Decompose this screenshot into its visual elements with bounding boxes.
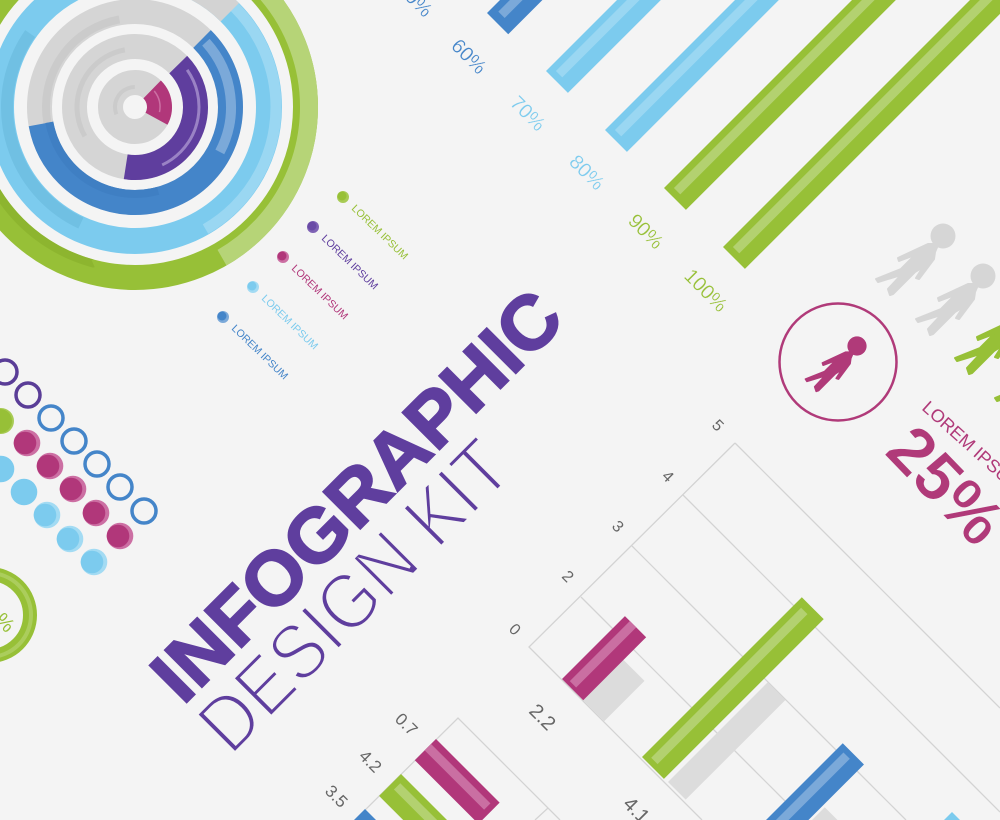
green dot: [0, 408, 14, 434]
axis label: 90%: 90%: [623, 210, 667, 254]
bar chart: lower: [321, 709, 560, 820]
icon: green person: [955, 302, 1000, 374]
legend: [217, 191, 410, 382]
bar: gray: [668, 682, 785, 800]
axis labels: 3: [608, 518, 627, 536]
icon: gray person: [876, 224, 956, 295]
icon: gray person: [916, 264, 996, 335]
axis label: 80%: 80%: [564, 151, 608, 195]
axis label: 70%: 70%: [505, 92, 549, 136]
bar: green 90%: [664, 0, 898, 210]
bar: light blue 70%: [546, 0, 667, 93]
axis labels: 4.2: [355, 746, 385, 777]
ring: blue: [0, 0, 271, 243]
axis labels: 2.2: [524, 700, 560, 735]
small green donut: [0, 573, 31, 657]
axis label: 60%: 60%: [446, 35, 490, 79]
icon: green person: [995, 342, 1000, 414]
bar chart: main: [505, 417, 1000, 820]
axis labels: 5: [708, 417, 727, 435]
purple outline rings: [0, 360, 40, 407]
axis labels: [505, 417, 727, 820]
title line: DESIGN KIT: DESIGN KIT: [180, 422, 527, 769]
axis labels: 0.7: [391, 709, 421, 740]
bar: green 100%: [723, 0, 1000, 269]
ring: magenta: [100, 72, 170, 142]
legend item: magenta: LOREM IPSUM: [289, 263, 350, 322]
bar: blue: [748, 743, 864, 820]
grid lines: [355, 718, 560, 820]
axis labels: [321, 709, 421, 812]
blue outline rings: [39, 406, 156, 523]
callout: 25%: [780, 304, 1000, 560]
magenta dots: [14, 430, 133, 549]
bar: green: [379, 774, 450, 820]
bar: blue: [344, 809, 379, 820]
light blue dots: [0, 456, 107, 575]
title: [135, 274, 579, 769]
axis labels: 2: [558, 568, 577, 586]
bar: green: [642, 597, 824, 779]
grid lines: [529, 443, 1000, 820]
bar: blue: [487, 0, 544, 34]
ring: light blue: [0, 0, 334, 306]
ring: green outer: [0, 0, 366, 338]
axis labels: 0: [505, 621, 524, 639]
percentage bar chart: [392, 0, 1000, 317]
dot matrix: [0, 360, 156, 575]
radial donut chart: [0, 0, 366, 338]
bar: gray: [583, 660, 645, 721]
bar: magenta: [415, 739, 500, 820]
axis label: 100%: 100%: [679, 265, 731, 317]
bar: gray: [800, 807, 842, 820]
legend item: purple: LOREM IPSUM: [319, 233, 380, 292]
ring: purple: [46, 18, 224, 196]
bar: light blue 80%: [605, 0, 786, 152]
legend item: green: LOREM IPSUM: [349, 203, 410, 262]
bar: light blue: [943, 812, 961, 820]
legend item: light blue: LOREM IPSUM: [259, 293, 320, 352]
title line: INFOGRAPHIC: INFOGRAPHIC: [135, 274, 579, 718]
axis labels: 4: [658, 468, 677, 486]
axis labels: 3.5: [321, 781, 351, 812]
bar: magenta: [562, 616, 646, 700]
people pictogram: [876, 224, 1000, 414]
icon: circled magenta person: [780, 304, 896, 420]
legend item: blue: LOREM IPSUM: [229, 323, 290, 382]
